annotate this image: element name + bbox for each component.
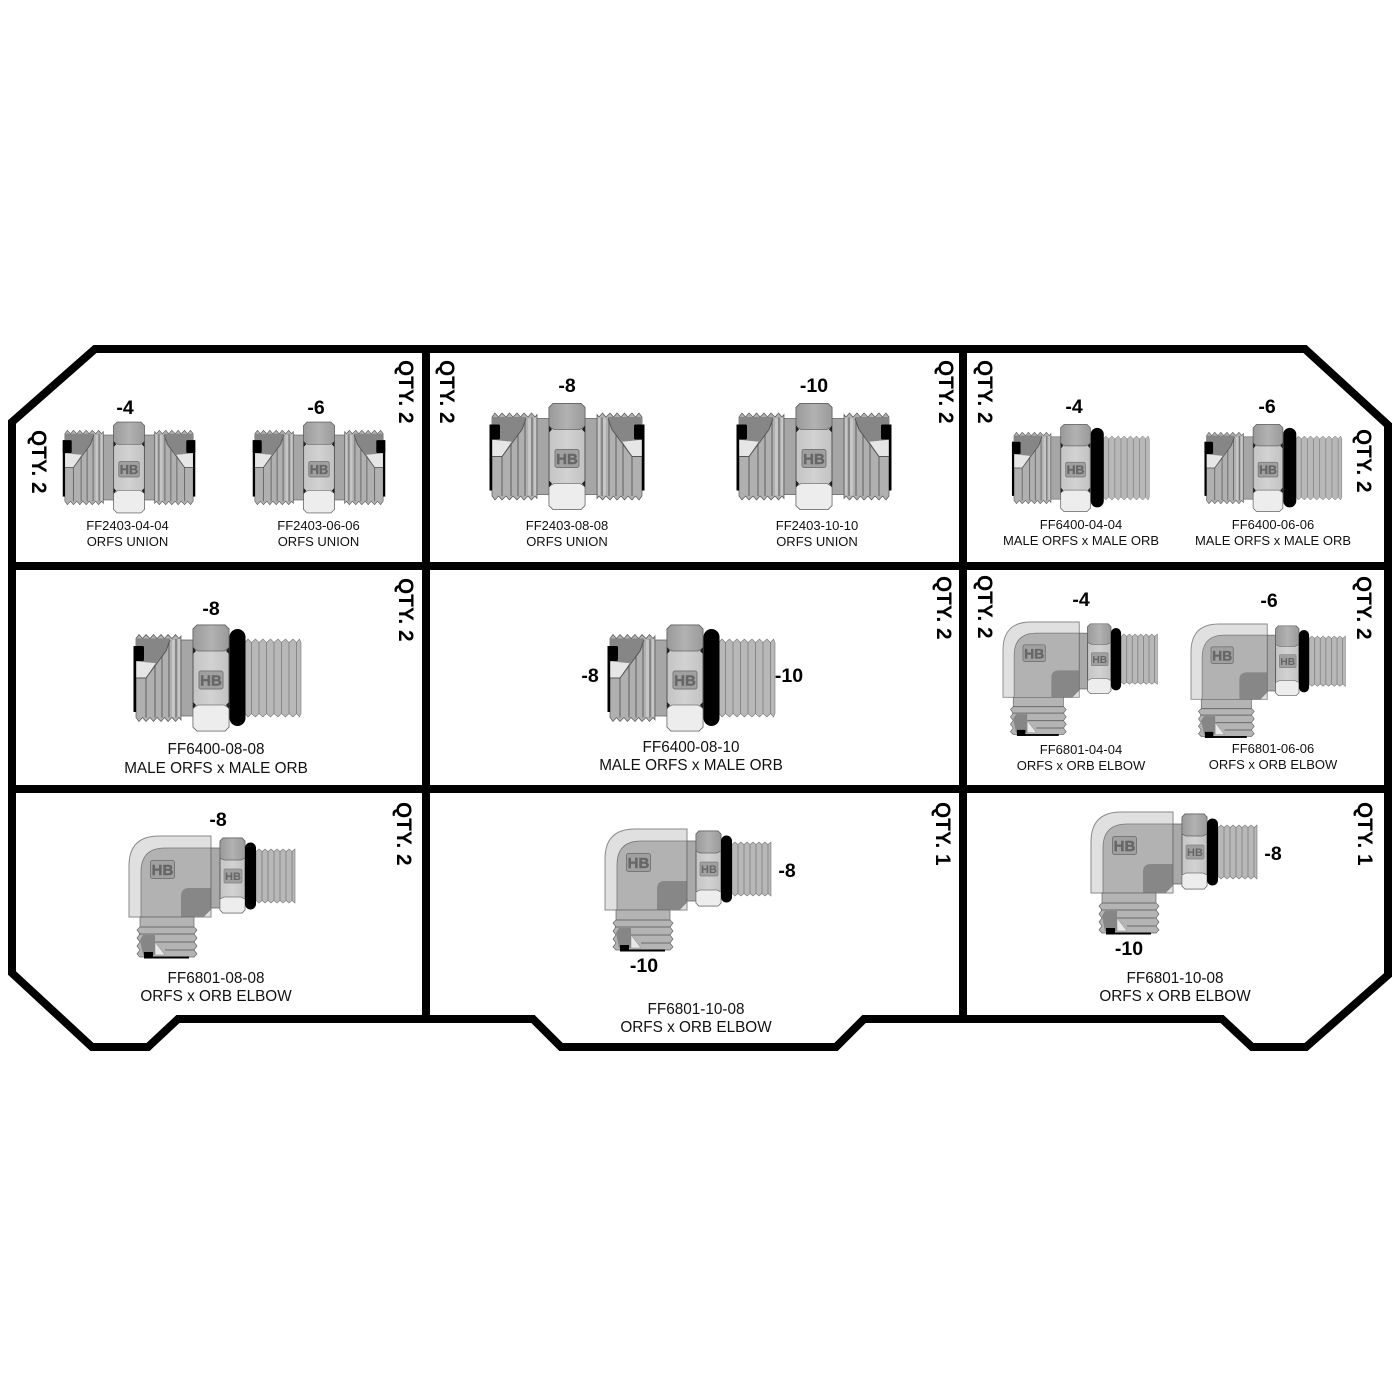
- part captions: ORFS UNION: [776, 534, 858, 549]
- quantity labels: QTY. 2: [435, 360, 458, 424]
- fitting: FF2403-04-04 union: [63, 422, 195, 513]
- part captions: MALE ORFS x MALE ORB: [599, 757, 783, 774]
- fitting: FF2403-10-10 union: HB: [803, 451, 825, 468]
- fitting: FF6400-08-10 male: [608, 625, 775, 731]
- size labels: [116, 375, 1282, 977]
- size labels: -10: [1115, 938, 1143, 960]
- quantity labels: QTY. 2: [394, 360, 417, 424]
- fitting: FF2403-08-08 union: HB: [556, 451, 578, 468]
- part captions: FF2403-10-10: [776, 518, 858, 533]
- size labels: -6: [307, 397, 325, 419]
- fitting: FF6801-04-04 elbow: HB: [1024, 645, 1044, 661]
- fitting: FF6801-04-04 elbow: [1003, 622, 1157, 736]
- fitting: FF6400-06-06 male: [1204, 425, 1342, 511]
- size labels: -10: [630, 955, 658, 977]
- fitting: FF6801-08-08 elbow: [129, 836, 295, 958]
- size labels: -10: [800, 375, 828, 397]
- size labels: -6: [1260, 590, 1278, 612]
- part captions: [86, 517, 1351, 1036]
- fitting: FF6801-08-08 elbow: HB: [152, 862, 173, 879]
- part captions: FF2403-06-06: [277, 518, 360, 533]
- size labels: -8: [778, 860, 796, 882]
- part captions: FF6801-10-08: [1127, 970, 1223, 987]
- part captions: FF6400-08-08: [168, 741, 264, 758]
- quantity labels: QTY. 2: [27, 430, 50, 494]
- quantity labels: QTY. 2: [973, 575, 996, 639]
- quantity labels: [27, 360, 1376, 866]
- fitting: FF2403-08-08 union: [490, 404, 644, 510]
- size labels: -8: [209, 809, 227, 831]
- fitting: FF6400-08-10 male: HB: [674, 672, 696, 690]
- part captions: MALE ORFS x MALE ORB: [1195, 533, 1351, 548]
- part captions: FF6400-04-04: [1040, 517, 1122, 532]
- fitting: FF6801-06-06 elbow: HB: [1212, 647, 1232, 663]
- size labels: -4: [116, 397, 134, 419]
- part captions: ORFS UNION: [526, 534, 608, 549]
- fitting: FF6400-08-08 male: [134, 625, 301, 731]
- part captions: FF6801-06-06: [1232, 741, 1314, 756]
- tray outline: [12, 349, 1388, 1047]
- fitting: FF6801-08-08 elbow: HB: [225, 871, 241, 883]
- part captions: ORFS x ORB ELBOW: [620, 1019, 772, 1036]
- fitting: FF2403-06-06 union: [253, 422, 385, 513]
- fitting: FF6801-10-08 elbow right: HB: [1114, 838, 1135, 855]
- quantity labels: QTY. 1: [931, 802, 954, 866]
- fitting: FF2403-10-10 union: [736, 404, 892, 510]
- part captions: FF6400-08-10: [643, 739, 739, 756]
- size labels: -10: [775, 665, 803, 687]
- quantity labels: QTY. 1: [1353, 802, 1376, 866]
- size labels: -8: [1264, 843, 1282, 865]
- part captions: MALE ORFS x MALE ORB: [1003, 533, 1159, 548]
- part captions: ORFS x ORB ELBOW: [1209, 757, 1338, 772]
- fitting: FF6801-10-08 elbow centre: HB: [701, 864, 717, 876]
- fitting: FF6801-10-08 elbow centre: HB: [628, 855, 649, 872]
- quantity labels: QTY. 2: [394, 578, 417, 642]
- part captions: ORFS UNION: [87, 534, 168, 549]
- size labels: -4: [1072, 589, 1090, 611]
- part captions: FF6801-04-04: [1040, 742, 1122, 757]
- part captions: FF2403-08-08: [526, 518, 608, 533]
- part captions: FF6801-10-08: [648, 1001, 744, 1018]
- fitting: FF6400-04-04 male: HB: [1067, 463, 1084, 477]
- part captions: ORFS x ORB ELBOW: [1017, 758, 1146, 773]
- size labels: -4: [1065, 396, 1083, 418]
- part captions: ORFS x ORB ELBOW: [1099, 988, 1251, 1005]
- part captions: ORFS UNION: [278, 534, 359, 549]
- quantity labels: QTY. 2: [934, 360, 957, 424]
- fitting: FF6801-04-04 elbow: HB: [1092, 655, 1107, 666]
- fitting: FF6801-10-08 elbow right: [1091, 812, 1257, 934]
- size labels: -8: [581, 665, 599, 687]
- quantity labels: QTY. 2: [932, 576, 955, 640]
- part captions: FF6400-06-06: [1232, 517, 1314, 532]
- fitting: FF6801-10-08 elbow centre: [605, 829, 771, 952]
- part captions: FF2403-04-04: [86, 518, 169, 533]
- part captions: FF6801-08-08: [168, 970, 264, 987]
- quantity labels: QTY. 2: [973, 360, 996, 424]
- fitting: FF6801-06-06 elbow: [1191, 624, 1345, 738]
- fitting: FF6801-10-08 elbow right: HB: [1187, 847, 1203, 859]
- size labels: -8: [558, 375, 576, 397]
- fitting: FF6400-04-04 male: [1012, 425, 1149, 511]
- part captions: MALE ORFS x MALE ORB: [124, 760, 308, 777]
- fitting: FF6400-08-08 male: HB: [200, 672, 222, 690]
- fitting: FF2403-04-04 union: HB: [120, 462, 138, 477]
- quantity labels: QTY. 2: [1352, 429, 1375, 493]
- size labels: -6: [1258, 396, 1276, 418]
- fitting: FF6400-06-06 male: HB: [1259, 463, 1277, 477]
- fitting: FF6801-06-06 elbow: HB: [1280, 657, 1295, 668]
- size labels: -8: [202, 598, 220, 620]
- fitting: FF2403-06-06 union: HB: [310, 462, 328, 477]
- quantity labels: QTY. 2: [1352, 576, 1375, 640]
- part captions: ORFS x ORB ELBOW: [140, 988, 292, 1005]
- quantity labels: QTY. 2: [392, 802, 415, 866]
